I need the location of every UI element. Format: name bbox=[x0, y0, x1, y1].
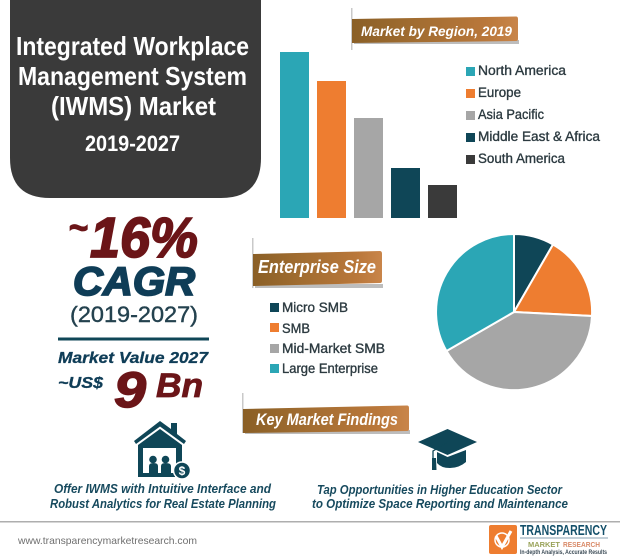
title: Management System bbox=[18, 61, 247, 91]
stat: market value bbox=[58, 350, 210, 418]
legend: region: South America bbox=[478, 151, 565, 166]
finding text: higher education bbox=[312, 482, 568, 511]
legend: region: North America bbox=[478, 63, 567, 78]
icon: house with people and dollar bbox=[134, 421, 190, 479]
legend: region bbox=[466, 63, 600, 166]
finding text: real estate planning: Robust Analytics for Real Estate Planning bbox=[50, 496, 276, 511]
heading ribbon: key market findings: Key Market Findings bbox=[256, 411, 398, 429]
finding text: real estate planning: Offer IWMS with Intuitive Interface and bbox=[54, 481, 272, 496]
divider bbox=[58, 338, 209, 340]
title: 2019-2027 bbox=[85, 131, 180, 156]
heading ribbon: enterprise size: Enterprise Size bbox=[258, 256, 376, 277]
stat: CAGR: 16% bbox=[90, 206, 198, 270]
bar chart: market by region bbox=[280, 52, 457, 218]
legend: region: Europe bbox=[478, 85, 521, 100]
logo: Transparency Market Research bbox=[489, 523, 608, 556]
stat: market value: ~US$ bbox=[58, 375, 104, 392]
legend: enterprise size: Micro SMB bbox=[282, 300, 348, 315]
pie chart: enterprise size bbox=[436, 234, 592, 390]
heading ribbon: market by region bbox=[351, 8, 519, 50]
stat: CAGR bbox=[68, 206, 198, 327]
stat: market value: Market Value 2027 bbox=[58, 350, 210, 367]
stat: market value: 9 bbox=[114, 362, 146, 418]
finding text: higher education: Tap Opportunities in Higher Education Sector bbox=[317, 482, 563, 497]
title panel bbox=[10, 0, 261, 198]
legend: enterprise size: SMB bbox=[282, 321, 310, 336]
stat: CAGR: CAGR bbox=[73, 260, 195, 304]
heading ribbon: enterprise size bbox=[252, 238, 383, 288]
icon: house with people and dollar: $ bbox=[179, 464, 186, 478]
stat: CAGR: (2019-2027) bbox=[70, 302, 198, 327]
stat: market value: Bn bbox=[156, 367, 203, 405]
heading ribbon: market by region: Market by Region, 2019 bbox=[361, 23, 512, 39]
legend: enterprise size: Mid-Market SMB bbox=[282, 341, 385, 356]
legend: enterprise size: Large Enterprise bbox=[282, 361, 378, 376]
icon: graduation cap bbox=[418, 429, 477, 470]
title bbox=[16, 31, 249, 156]
legend: region: Asia Pacific bbox=[478, 107, 544, 122]
finding text: higher education: to Optimize Space Reporting and Maintenance bbox=[312, 496, 568, 511]
legend: enterprise size bbox=[270, 300, 385, 376]
legend: region: Middle East & Africa bbox=[478, 129, 600, 144]
heading ribbon: key market findings bbox=[242, 393, 410, 434]
title: (IWMS) Market bbox=[51, 91, 216, 121]
logo: Transparency Market Research: In-depth Analysis, Accurate Results bbox=[520, 550, 608, 556]
title: Integrated Workplace bbox=[16, 31, 249, 61]
logo: Transparency Market Research: RESEARCH bbox=[563, 540, 600, 549]
finding text: real estate planning bbox=[50, 481, 276, 511]
logo: Transparency Market Research: MARKET bbox=[528, 540, 560, 549]
footer url: www.transparencymarketresearch.com bbox=[17, 535, 197, 547]
stat: CAGR: ~ bbox=[68, 206, 88, 250]
